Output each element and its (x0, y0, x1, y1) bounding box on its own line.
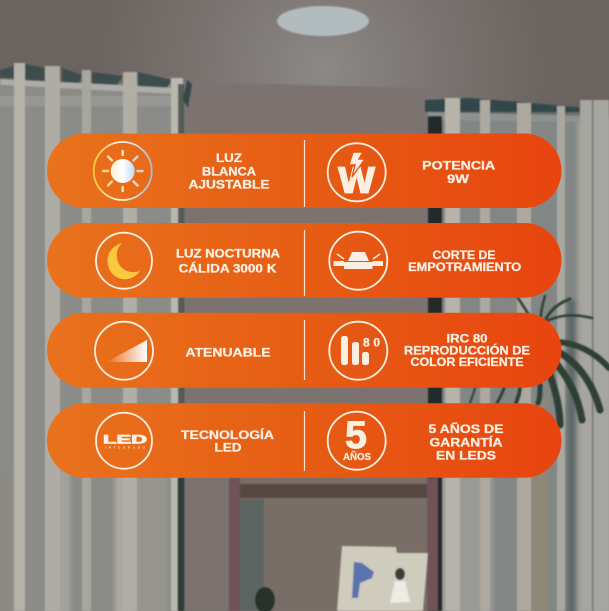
text: potencia 9w: POTENCIA (422, 159, 496, 173)
icon: LED (96, 413, 152, 469)
pill: row 2 (47, 223, 562, 298)
text: 5 anos de garantia en leds: GARANTÍA (430, 435, 503, 450)
pill: row 3 (47, 313, 562, 388)
center dividers (304, 140, 306, 471)
text: luz blanca ajustable (188, 151, 270, 191)
icon: 5 years warranty: 5 (345, 414, 367, 457)
icon: power 9W: W (339, 160, 375, 200)
wall (185, 82, 430, 611)
pill: row 4 (47, 403, 562, 478)
right curtain fabric (438, 115, 609, 611)
text: 5 anos de garantia en leds (428, 421, 504, 463)
text: corte de empotramiento: EMPOTRAMIENTO (408, 260, 521, 274)
left curtain fabric (0, 84, 183, 611)
icon: IRC 80 bars (329, 322, 387, 380)
icon: crescent moon (96, 233, 152, 289)
text: luz blanca ajustable: AJUSTABLE (188, 177, 270, 191)
pill: row 1 (47, 134, 562, 208)
icon: LED: INTEGRADO (105, 446, 146, 450)
text: 5 anos de garantia en leds: EN LEDS (436, 449, 496, 463)
icon: 5 years warranty: AÑOS (343, 450, 371, 463)
text: 5 anos de garantia en leds: 5 AÑOS DE (428, 421, 504, 436)
icon: IRC 80 bars: 80 (363, 336, 380, 350)
text: luz blanca ajustable: LUZ (216, 151, 242, 165)
right curtain pleats and rod (425, 98, 609, 611)
icon: dimmable wedge (95, 322, 153, 380)
text: luz blanca ajustable: BLANCA (202, 164, 256, 178)
text: corte de empotramiento (408, 248, 521, 274)
icon: LED: LED (103, 434, 147, 446)
icon: adjustable white light sun (94, 142, 152, 200)
icon: recessed cut-out (329, 232, 387, 290)
text: tecnologia led: TECNOLOGÍA (181, 427, 274, 442)
plant fronds (470, 296, 609, 425)
text: luz nocturna calida: LUZ NOCTURNA (176, 247, 280, 261)
text: potencia 9w (422, 159, 496, 186)
text: irc 80 reproduccion de color eficiente (404, 332, 530, 369)
text: irc 80 reproduccion de color eficiente: IRC 80 (446, 332, 488, 346)
icon: 5 years warranty (328, 412, 386, 470)
text: luz nocturna calida (176, 247, 280, 275)
text: corte de empotramiento: CORTE DE (432, 248, 496, 262)
text: atenuable: ATENUABLE (186, 345, 270, 359)
text: tecnologia led (181, 427, 274, 455)
text: tecnologia led: LED (214, 441, 242, 455)
text: luz nocturna calida: CÁLIDA 3000 K (178, 260, 277, 275)
ceiling lamp (277, 6, 369, 36)
icon: power 9W (328, 143, 386, 201)
shelf (178, 478, 438, 611)
text: potencia 9w: 9W (447, 172, 470, 186)
left curtain pleats and rod (0, 63, 192, 611)
framed photos (337, 546, 428, 611)
text: irc 80 reproduccion de color eficiente: REPRODUCCIÓN DE (404, 342, 530, 357)
text: irc 80 reproduccion de color eficiente: COLOR EFICIENTE (410, 355, 524, 369)
